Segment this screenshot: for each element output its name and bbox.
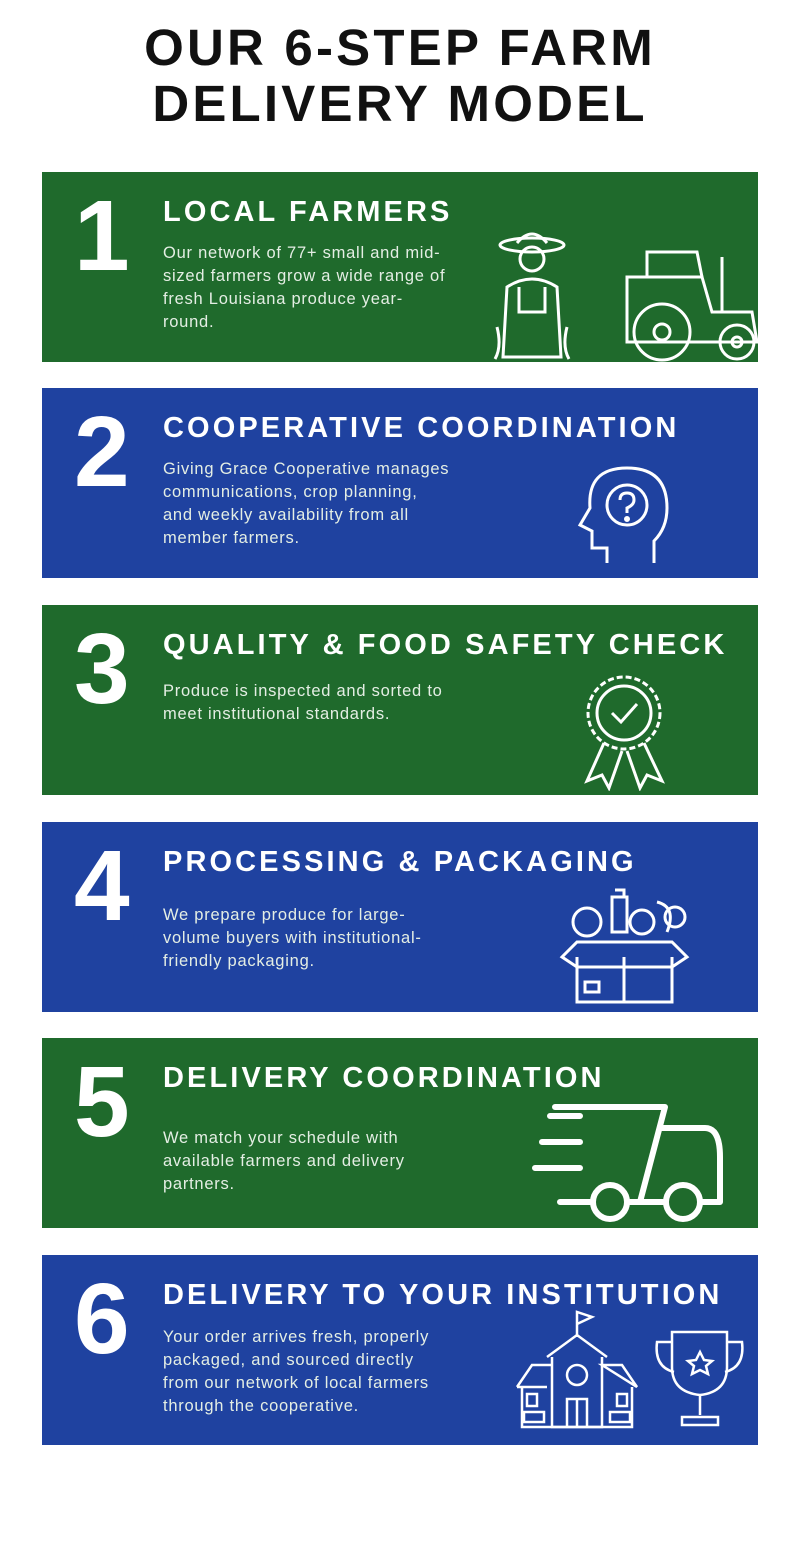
text 3: meet institutional standards.	[163, 705, 390, 723]
heading 2: COOPERATIVE COORDINATION	[163, 412, 679, 444]
title	[144, 19, 656, 132]
icon: award ribbon	[584, 676, 665, 791]
text 5: available farmers and delivery	[163, 1152, 405, 1170]
number 1: 1	[74, 180, 130, 292]
text 5	[163, 1129, 405, 1193]
heading 3: QUALITY & FOOD SAFETY CHECK	[163, 629, 727, 661]
heading 4: PROCESSING & PACKAGING	[163, 846, 637, 878]
text 6: from our network of local farmers	[163, 1374, 429, 1392]
title: OUR 6-STEP FARM	[144, 19, 656, 76]
number 2: 2	[74, 396, 130, 508]
icon: produce box	[560, 888, 690, 1004]
text 4: volume buyers with institutional-	[163, 929, 422, 947]
panel: step 4 processing	[42, 822, 758, 1012]
text 6: Your order arrives fresh, properly	[163, 1328, 429, 1346]
text 5: partners.	[163, 1175, 235, 1193]
text 1: fresh Louisiana produce year-	[163, 290, 403, 308]
icon: head with question	[578, 466, 668, 563]
text 4: friendly packaging.	[163, 952, 315, 970]
panel: step 2 cooperative coordination	[42, 388, 758, 578]
icon: school and trophy	[516, 1310, 744, 1428]
panel: step 5 delivery coordination	[42, 1038, 758, 1228]
number 6: 6	[74, 1263, 130, 1375]
text 2: member farmers.	[163, 529, 300, 547]
text 1: sized farmers grow a wide range of	[163, 267, 445, 285]
text 2: Giving Grace Cooperative manages	[163, 460, 449, 478]
text 1: round.	[163, 313, 214, 331]
text 2: communications, crop planning,	[163, 483, 418, 501]
number 5: 5	[74, 1046, 130, 1158]
panel: step 1 local farmers	[42, 172, 758, 362]
text 2	[163, 460, 449, 547]
heading 1: LOCAL FARMERS	[163, 196, 452, 228]
panel: step 3 quality check	[42, 605, 758, 795]
text 3	[163, 682, 443, 723]
icon: fast truck	[532, 1104, 723, 1222]
number 4: 4	[74, 830, 130, 942]
text 3: Produce is inspected and sorted to	[163, 682, 443, 700]
number 3: 3	[74, 613, 130, 725]
text 6	[163, 1328, 429, 1415]
text 2: and weekly availability from all	[163, 506, 409, 524]
title: DELIVERY MODEL	[152, 75, 648, 132]
text 5: We match your schedule with	[163, 1129, 398, 1147]
panel: step 6 delivery to institution	[42, 1255, 758, 1445]
text 4: We prepare produce for large-	[163, 906, 405, 924]
heading 5: DELIVERY COORDINATION	[163, 1062, 605, 1094]
heading 6: DELIVERY TO YOUR INSTITUTION	[163, 1279, 722, 1311]
text 6: packaged, and sourced directly	[163, 1351, 414, 1369]
text 1	[163, 244, 445, 331]
text 1: Our network of 77+ small and mid-	[163, 244, 440, 262]
text 6: through the cooperative.	[163, 1397, 359, 1415]
icon: farmer and tractor	[494, 232, 758, 362]
text 4	[163, 906, 422, 970]
